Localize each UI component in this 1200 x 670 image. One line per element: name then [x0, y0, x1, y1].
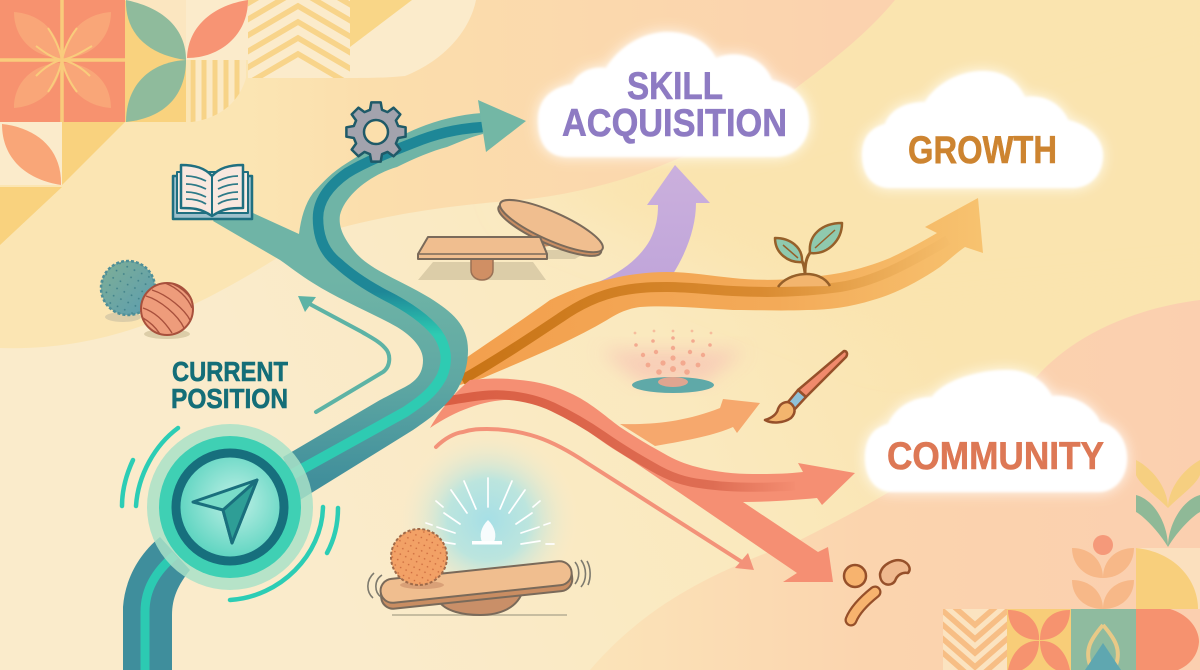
arrow: thin teal bend: [306, 302, 389, 412]
icon: sprinkle pool: [600, 330, 745, 393]
label: current position: CURRENT: [172, 356, 288, 387]
cloud: skill acquisition: ACQUISITION: [562, 102, 787, 145]
cloud: skill acquisition: SKILL: [627, 65, 723, 108]
icon: sprout: [775, 223, 842, 287]
label: current position: POSITION: [171, 383, 288, 414]
icon: tilted balance boards: [418, 191, 608, 280]
cloud: growth: [862, 71, 1103, 188]
icon: navigation arrow: [193, 480, 257, 543]
cloud: community: [865, 370, 1127, 492]
path: teal main route: [213, 100, 526, 500]
icon: paintbrush: [765, 351, 847, 422]
icon: gear: [346, 102, 406, 162]
geometric tiles: bottom right: [935, 460, 1200, 670]
icon: wobble board with spiky ball: [368, 529, 590, 615]
arrow: orange small to paintbrush: [620, 399, 760, 446]
cloud: community: COMMUNITY: [887, 435, 1104, 478]
cloud: skill acquisition: [538, 32, 809, 157]
label: current position: [171, 356, 288, 414]
arrow: thin salmon line: [436, 429, 754, 570]
icon: book: [173, 165, 252, 219]
geometric tiles: top left: [0, 0, 412, 245]
icon: glow with rays: [398, 430, 578, 610]
arrow: orange path to growth: [460, 198, 983, 385]
motion arcs around node: [122, 428, 338, 600]
node: current position marker: [147, 424, 313, 590]
cloud: growth: GROWTH: [908, 129, 1057, 172]
arrow: lavender to skill acquisition: [593, 165, 710, 284]
icon: figure made of shapes: [844, 560, 910, 620]
path: teal route below node: [123, 537, 190, 670]
icon: massage balls: [101, 261, 193, 339]
arrow: salmon path to community: [430, 378, 855, 582]
